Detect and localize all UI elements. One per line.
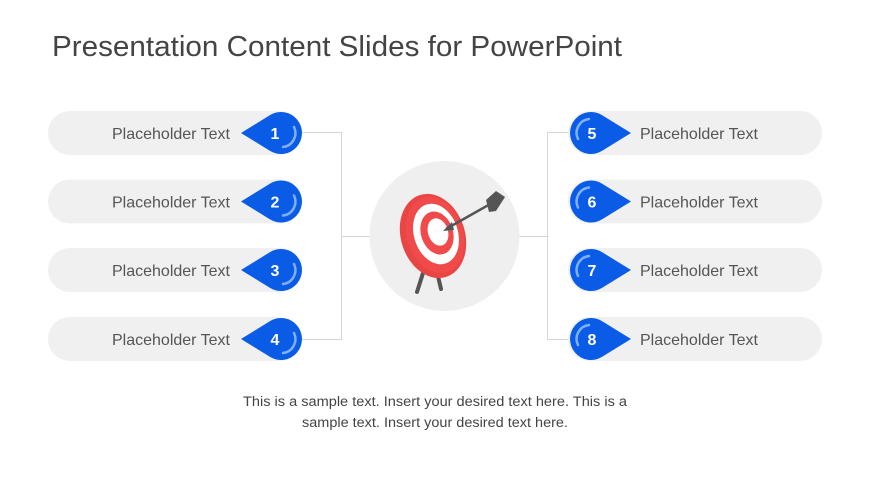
item 5 [568, 111, 822, 155]
item 6: 6 [588, 194, 597, 212]
item 3 [48, 248, 302, 292]
item 5: 5 [588, 126, 597, 143]
item 6: Placeholder Text [640, 194, 759, 212]
item 1: Placeholder Text [112, 126, 231, 143]
item 8 [568, 317, 822, 361]
panel: left items [48, 111, 302, 361]
item 4: 4 [271, 332, 280, 349]
item 1 [48, 111, 302, 155]
caption [243, 394, 628, 430]
caption: sample text. Insert your desired text here. [302, 415, 568, 430]
item 4: Placeholder Text [112, 332, 231, 349]
item 7: 7 [588, 263, 597, 280]
item 5: Placeholder Text [640, 126, 759, 143]
connector lines [300, 132, 570, 340]
item 2: Placeholder Text [112, 194, 231, 212]
item 3: 3 [271, 263, 280, 280]
item 8: Placeholder Text [640, 332, 759, 349]
item 4 [48, 317, 302, 361]
panel: right items [568, 111, 822, 361]
item 2: 2 [271, 194, 280, 212]
item 3: Placeholder Text [112, 263, 231, 280]
item 6 [568, 180, 822, 224]
caption: This is a sample text. Insert your desired text here. This is a [243, 394, 628, 409]
item 7: Placeholder Text [640, 263, 759, 280]
title: Presentation Content Slides for PowerPoint [52, 31, 622, 63]
item 2 [48, 180, 302, 224]
icon: target with dart [370, 161, 520, 311]
item 1: 1 [271, 126, 280, 143]
item 8: 8 [588, 332, 597, 349]
item 7 [568, 248, 822, 292]
